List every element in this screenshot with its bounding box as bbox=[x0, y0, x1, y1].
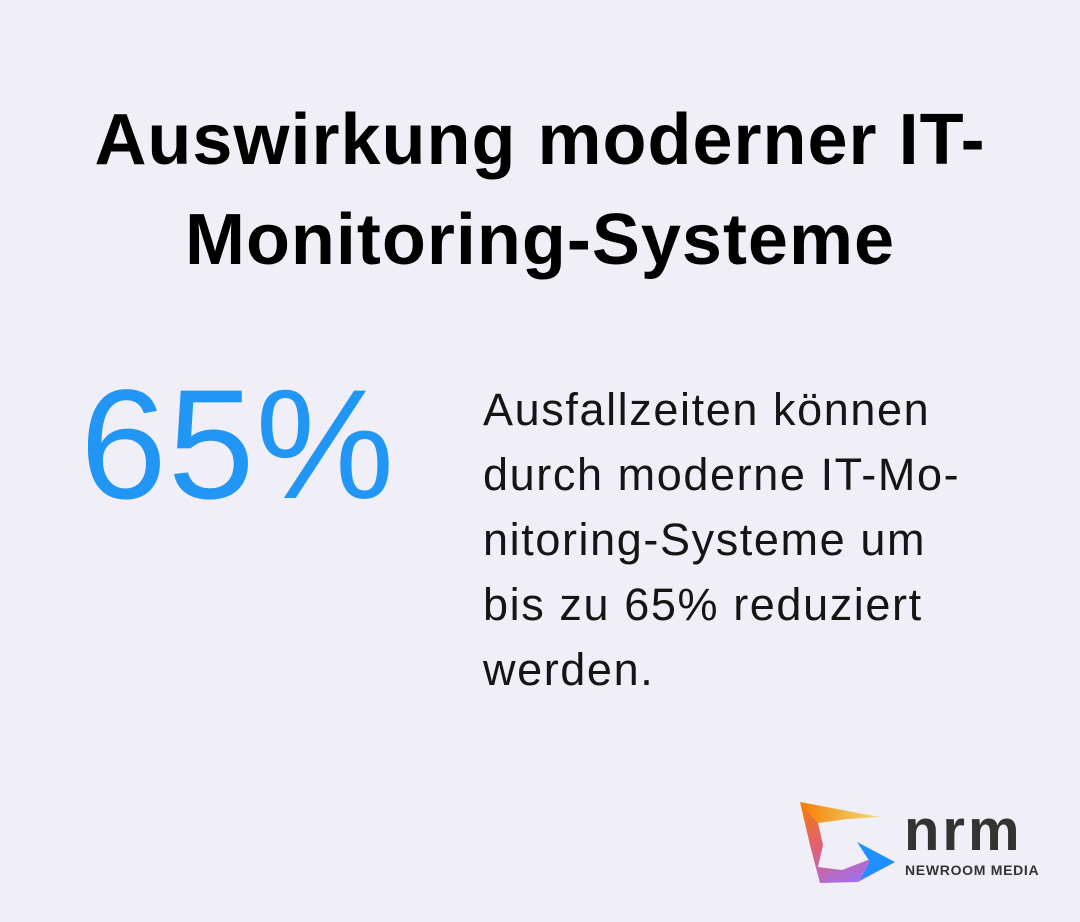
description text: durch moderne IT-Mo- bbox=[483, 449, 960, 500]
description text: werden. bbox=[483, 644, 654, 695]
description text: bis zu 65% reduziert bbox=[483, 579, 923, 630]
description text: Ausfallzeiten können bbox=[483, 384, 930, 435]
logo: newroom media bbox=[800, 800, 1039, 883]
title: Auswirkung moderner IT- bbox=[94, 100, 986, 180]
title: Monitoring-Systeme bbox=[185, 200, 895, 280]
big stat 65%: 65% bbox=[80, 358, 395, 532]
description text bbox=[483, 384, 960, 695]
description text: nitoring-Systeme um bbox=[483, 514, 926, 565]
logo: newroom media: NEWROOM MEDIA bbox=[905, 862, 1039, 878]
title bbox=[94, 100, 986, 280]
